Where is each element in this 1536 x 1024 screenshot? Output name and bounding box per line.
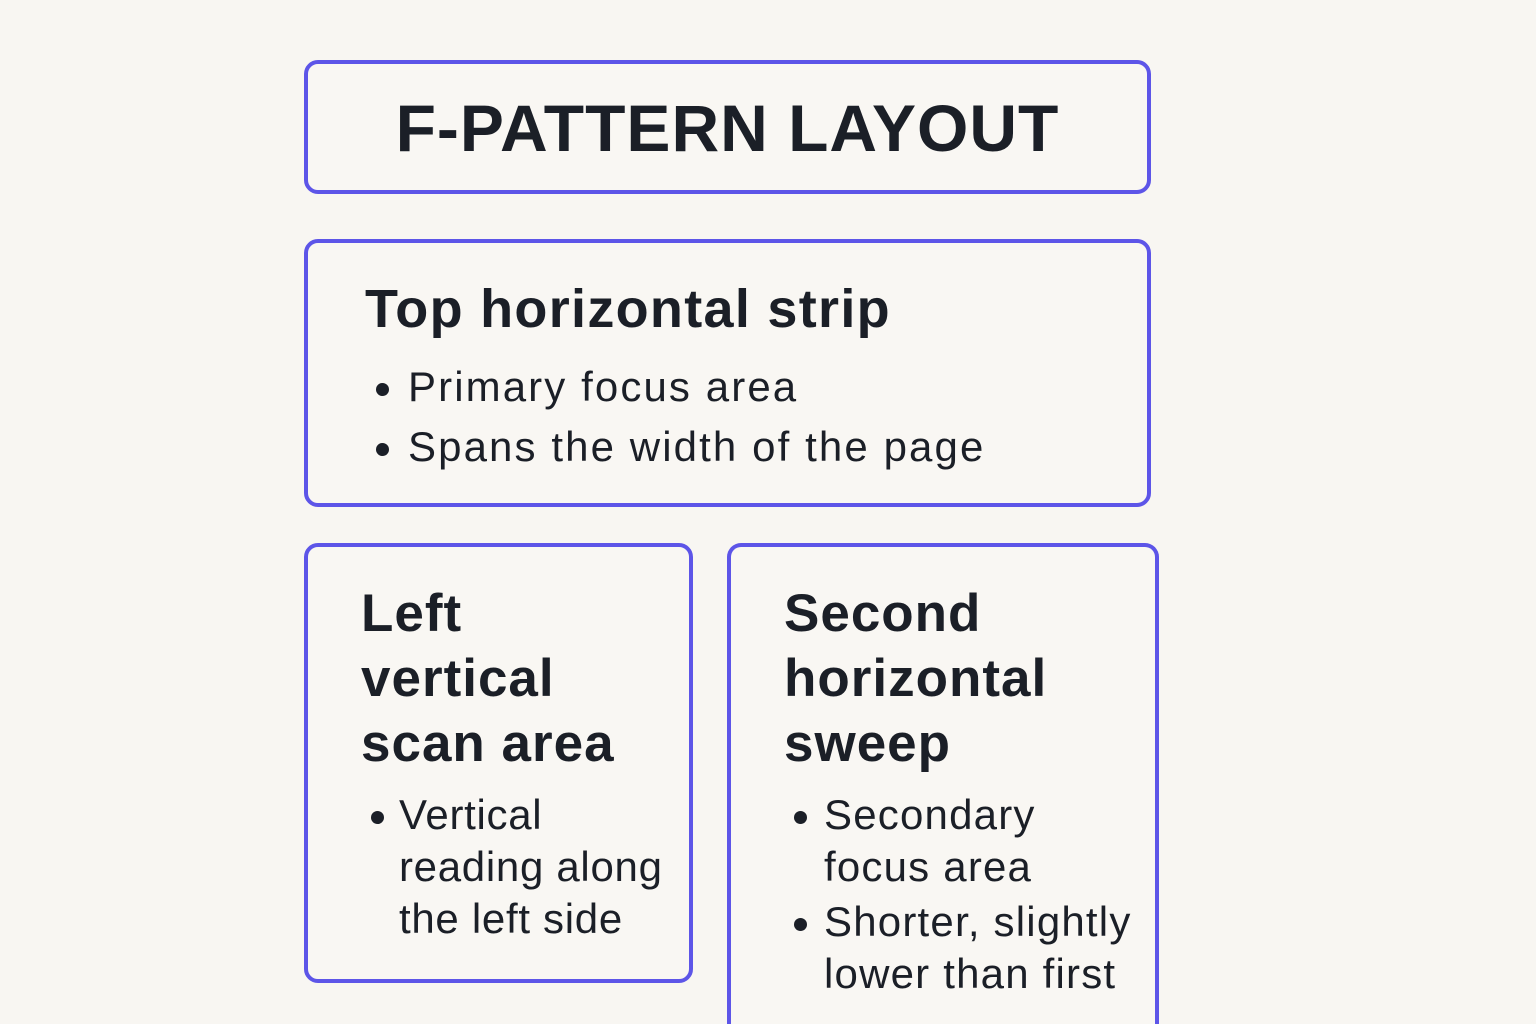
bullet list: left vertical: the left side — [399, 895, 623, 942]
heading: second horizontal sweep: Second — [784, 584, 981, 643]
bullet list: top strip: Primary focus area — [408, 363, 798, 410]
bullet list: top strip: Spans the width of the page — [408, 423, 985, 470]
heading: left vertical scan area: Left — [361, 584, 462, 643]
heading: top horizontal strip: Top horizontal strip — [365, 279, 891, 339]
heading: second horizontal sweep: horizontal — [784, 649, 1047, 708]
bullet list: second sweep: Secondary — [824, 791, 1036, 838]
heading: left vertical scan area — [361, 584, 615, 773]
bullet list: second sweep: Shorter, slightly — [824, 898, 1132, 945]
heading: second horizontal sweep — [784, 584, 1047, 773]
bullet list: second sweep: focus area — [824, 843, 1032, 890]
title box — [304, 60, 1151, 194]
panel: second horizontal sweep — [727, 543, 1159, 1024]
heading: left vertical scan area: vertical — [361, 649, 555, 708]
panel: left vertical scan area — [304, 543, 693, 983]
bullet list: left vertical: Vertical — [399, 791, 542, 838]
bullet list: second sweep — [794, 791, 1132, 997]
bullet list: top strip — [376, 363, 985, 470]
bullet list: left vertical — [371, 791, 663, 942]
title: F-PATTERN LAYOUT — [396, 91, 1059, 165]
panel: top horizontal strip — [304, 239, 1151, 507]
heading: second horizontal sweep: sweep — [784, 714, 951, 773]
bullet list: left vertical: reading along — [399, 843, 663, 890]
heading: left vertical scan area: scan area — [361, 714, 615, 773]
bullet list: second sweep: lower than first — [824, 950, 1116, 997]
